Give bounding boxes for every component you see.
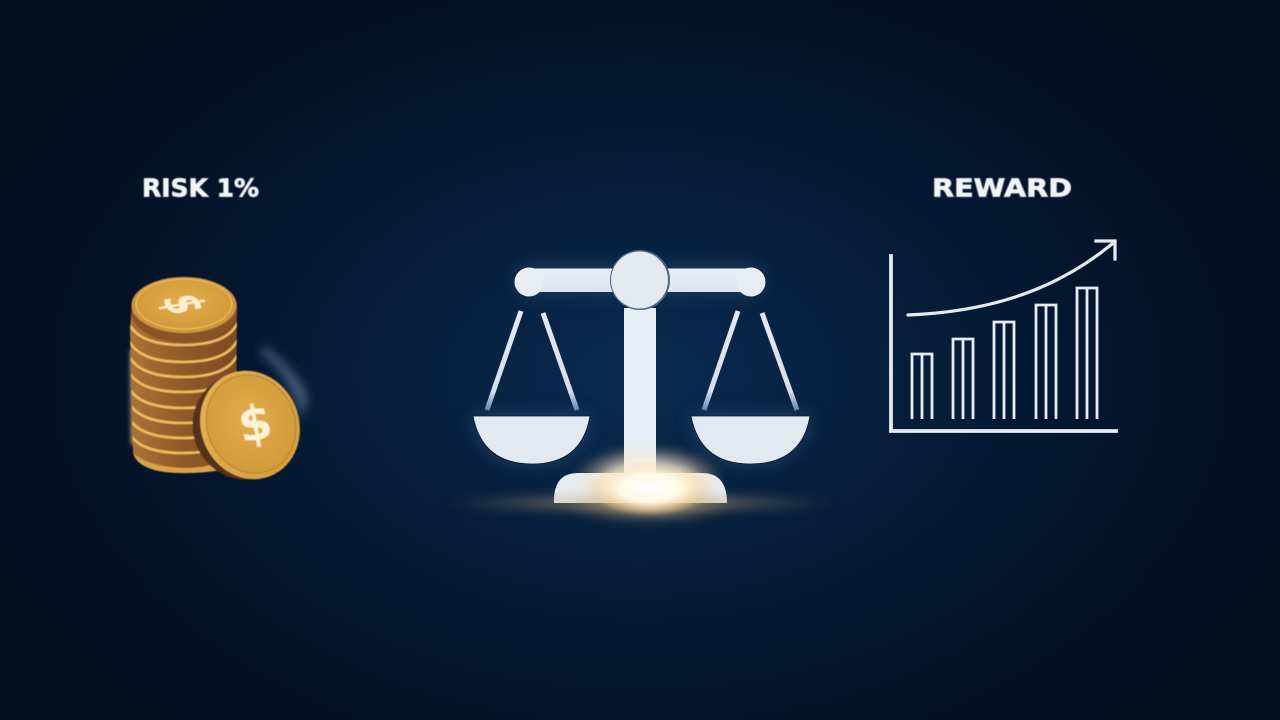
label: risk 1%: RISK 1% (142, 174, 259, 202)
label: reward: REWARD (932, 174, 1072, 202)
light flare at base (440, 446, 840, 525)
base (554, 473, 727, 503)
front coin dollar symbol: $ (234, 394, 276, 454)
scale glow (473, 266, 810, 463)
pivot (610, 250, 670, 310)
right pan strings (704, 311, 797, 410)
icon: stack of gold coins (128, 277, 316, 495)
axes (891, 256, 1116, 431)
right pan (691, 416, 810, 464)
top coin dollar symbol: $ (149, 290, 219, 318)
bars (912, 288, 1097, 419)
trend arrow (908, 241, 1115, 315)
front leaning coin (177, 359, 309, 495)
top coin (132, 284, 236, 342)
left pan strings (487, 311, 577, 410)
left pan (473, 416, 590, 464)
beam (514, 268, 766, 296)
stack body with coin edges (128, 300, 240, 476)
chart: rising bars with arrow (891, 241, 1116, 431)
icon: balance scale (440, 250, 840, 525)
column (624, 308, 656, 480)
